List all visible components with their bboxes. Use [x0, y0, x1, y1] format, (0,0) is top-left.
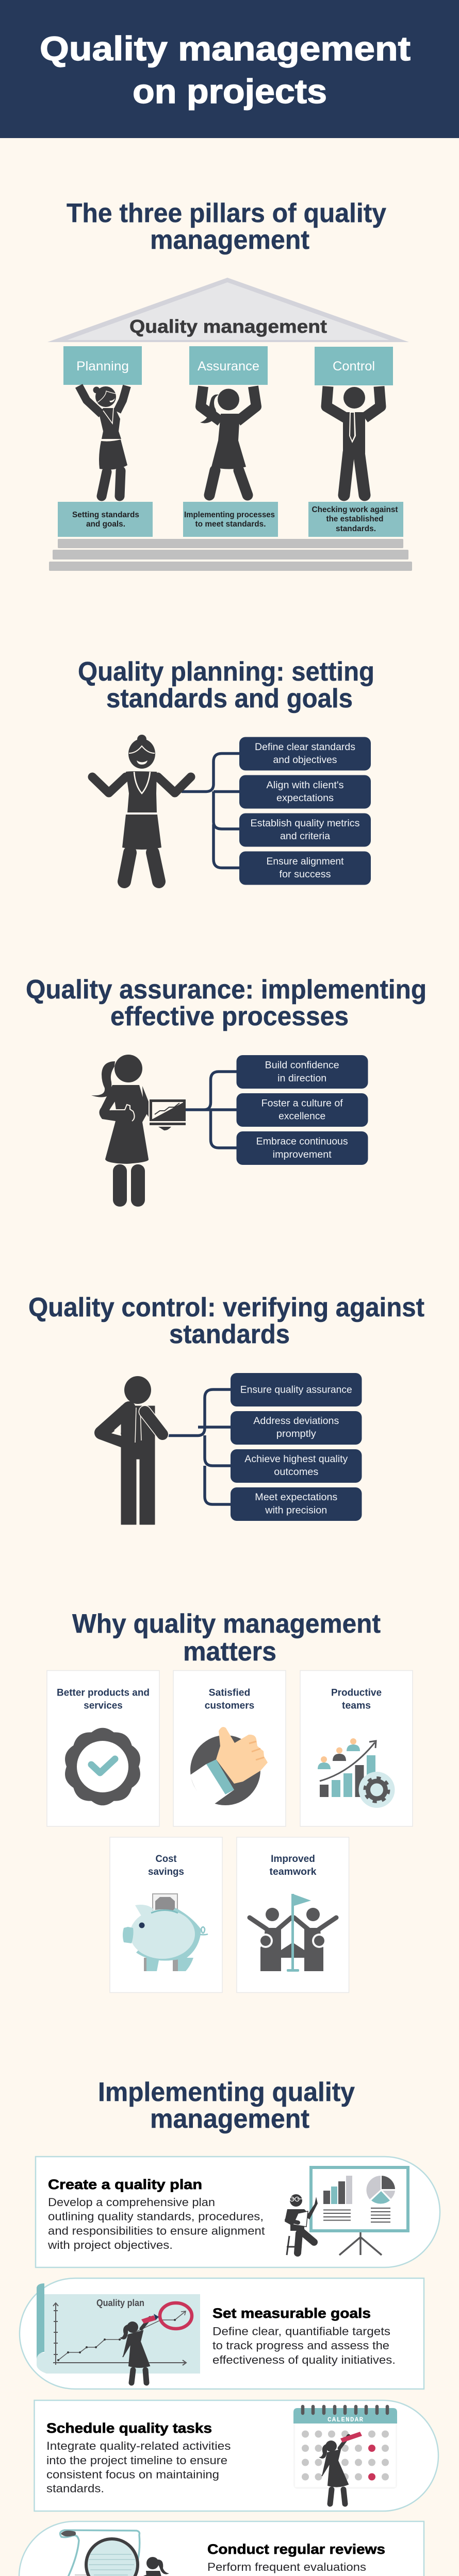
step text — [212, 2306, 396, 2366]
bullet text: in direction — [277, 1073, 326, 1084]
bullet text: Establish quality metrics — [251, 818, 360, 829]
icon: thumbs up — [190, 1727, 268, 1805]
step text: to track progress and assess the — [212, 2339, 389, 2352]
step text: effectiveness of quality initiatives. — [212, 2353, 396, 2366]
card: cost savings — [110, 1837, 222, 1993]
bullet text: promptly — [276, 1429, 316, 1439]
heading: three pillars: management — [150, 225, 309, 255]
card: improved teamwork — [237, 1837, 349, 1993]
heading: quality assurance: effective processes — [110, 1002, 349, 1031]
title: Quality management — [40, 29, 411, 67]
pillar descriptions — [72, 505, 398, 533]
pillar labels: Control — [333, 359, 375, 374]
bullet text: Achieve highest quality — [244, 1454, 348, 1465]
card: improved teamwork: Improved — [271, 1854, 315, 1865]
step text: Perform frequent evaluations — [207, 2561, 366, 2573]
panel: schedule quality tasks — [34, 2400, 438, 2511]
icon: growth chart with team and gear — [318, 1738, 395, 1808]
step text: Create a quality plan — [48, 2177, 202, 2192]
card: cost savings: Cost — [156, 1854, 177, 1865]
illustration: quality plan chart — [37, 2283, 200, 2383]
card: productive teams: Productive — [331, 1688, 382, 1698]
step text: into the project timeline to ensure — [46, 2454, 227, 2467]
pillar descriptions: Checking work against — [312, 505, 398, 514]
connector tree — [167, 1389, 232, 1504]
bullet text: Ensure alignment — [266, 856, 344, 867]
bullet boxes — [239, 737, 371, 885]
step text: Schedule quality tasks — [46, 2420, 212, 2436]
bullet text: Embrace continuous — [256, 1137, 348, 1147]
bullet text: for success — [280, 869, 331, 880]
heading: quality assurance: Quality assurance: implementing — [26, 975, 427, 1005]
pillar descriptions: the established — [326, 515, 384, 523]
panel: create a quality plan — [36, 2157, 440, 2267]
bullet text: improvement — [273, 1149, 332, 1160]
header band — [0, 0, 459, 138]
bullet text: excellence — [278, 1111, 325, 1122]
card: cost savings: savings — [148, 1867, 184, 1877]
card: better products and services: Better products and — [57, 1688, 150, 1698]
pillar labels — [76, 359, 375, 374]
step text: standards. — [46, 2482, 104, 2495]
pillar descriptions: Setting standards — [72, 511, 139, 519]
bullet text: Align with client's — [266, 780, 343, 791]
bullet text: outcomes — [274, 1467, 318, 1478]
heading: quality control: Quality control: verifying against — [28, 1293, 424, 1323]
pillar descriptions: to meet standards. — [195, 520, 266, 529]
card: productive teams — [300, 1670, 413, 1826]
card: satisfied customers: Satisfied — [209, 1688, 250, 1698]
diagram: temple of quality management — [47, 278, 412, 571]
bullet text — [256, 1060, 348, 1160]
bullet text: Meet expectations — [255, 1492, 337, 1503]
step text: and responsibilities to ensure alignment — [48, 2225, 265, 2237]
bullet text — [240, 1385, 352, 1516]
bullet text: Ensure quality assurance — [240, 1385, 352, 1395]
panel: quality planning diagram — [92, 735, 371, 885]
title: on projects — [133, 72, 327, 110]
card: satisfied customers: customers — [205, 1700, 254, 1711]
panel: quality assurance diagram — [91, 1055, 368, 1207]
heading: quality assurance — [26, 975, 427, 1031]
card: productive teams: teams — [342, 1700, 371, 1711]
bullet text: Foster a culture of — [261, 1098, 343, 1109]
bullet boxes — [231, 1373, 362, 1521]
panel: quality control diagram — [101, 1373, 362, 1524]
card: better products and services: services — [84, 1700, 123, 1711]
pillar descriptions: Implementing processes — [184, 511, 275, 519]
heading: three pillars — [67, 198, 386, 255]
step text: Conduct regular reviews — [207, 2541, 385, 2557]
connector tree — [186, 1072, 237, 1148]
pillar descriptions: and goals. — [86, 520, 125, 529]
temple roof label: Quality management — [129, 316, 327, 337]
card: better products and services — [47, 1670, 159, 1826]
heading: quality control — [28, 1293, 424, 1349]
heading: quality planning — [78, 657, 374, 714]
bullet text: Define clear standards — [255, 742, 355, 753]
bullet text: and criteria — [280, 831, 330, 842]
bullet text: Address deviations — [253, 1416, 339, 1427]
illustration: presenter at chart board — [285, 2167, 408, 2255]
step text — [47, 2177, 265, 2251]
bullet text: with precision — [265, 1505, 327, 1516]
pillar descriptions: standards. — [336, 524, 376, 533]
heading: why quality management matters: Why quality management — [72, 1609, 381, 1639]
pillar labels: Assurance — [198, 359, 259, 374]
bullet text: expectations — [276, 793, 334, 804]
illustration: quality plan chart: Quality plan — [96, 2298, 144, 2308]
heading: three pillars: The three pillars of quality — [67, 198, 386, 228]
connector tree — [182, 753, 240, 868]
step text: outlining quality standards, procedures, — [48, 2210, 264, 2223]
illustration: calendar with woman: CALENDAR — [327, 2416, 363, 2424]
icon: quality badge — [65, 1728, 140, 1805]
icon: team with flag — [250, 1894, 336, 1972]
panel: set measurable goals — [20, 2278, 424, 2389]
step text: consistent focus on maintaining — [46, 2468, 219, 2481]
card: improved teamwork: teamwork — [269, 1867, 317, 1877]
heading: quality planning: Quality planning: setting — [78, 657, 374, 687]
bullet text — [251, 742, 360, 880]
heading: implementing quality management: Implementing quality — [98, 2077, 355, 2107]
step text: Develop a comprehensive plan — [48, 2196, 215, 2209]
heading: quality planning: standards and goals — [106, 684, 353, 714]
step text: Integrate quality-related activities — [46, 2439, 231, 2452]
step text — [46, 2420, 231, 2495]
bullet text: and objectives — [273, 755, 337, 766]
step text: Set measurable goals — [212, 2306, 371, 2321]
heading: why quality management matters: matters — [183, 1637, 276, 1667]
illustration: scroll and magnifier — [59, 2530, 173, 2576]
step text: Define clear, quantifiable targets — [212, 2325, 390, 2338]
step text: with project objectives. — [47, 2239, 173, 2251]
heading: implementing quality management — [98, 2077, 355, 2134]
pillar labels: Planning — [76, 359, 129, 374]
panel: conduct regular reviews — [19, 2521, 424, 2576]
step text — [207, 2541, 402, 2576]
card: satisfied customers — [173, 1670, 286, 1826]
bullet boxes — [236, 1055, 368, 1165]
figure: businesswoman — [92, 735, 191, 882]
heading: implementing quality management: management — [150, 2104, 309, 2134]
icon: piggy bank — [123, 1894, 208, 1971]
heading: quality control: standards — [169, 1319, 290, 1349]
illustration: calendar with woman — [293, 2406, 397, 2504]
heading: why quality management matters — [72, 1609, 381, 1667]
bullet text: Build confidence — [265, 1060, 339, 1071]
figure: woman with laptop — [91, 1055, 186, 1207]
figure: man checking — [101, 1376, 162, 1524]
title — [40, 29, 411, 110]
